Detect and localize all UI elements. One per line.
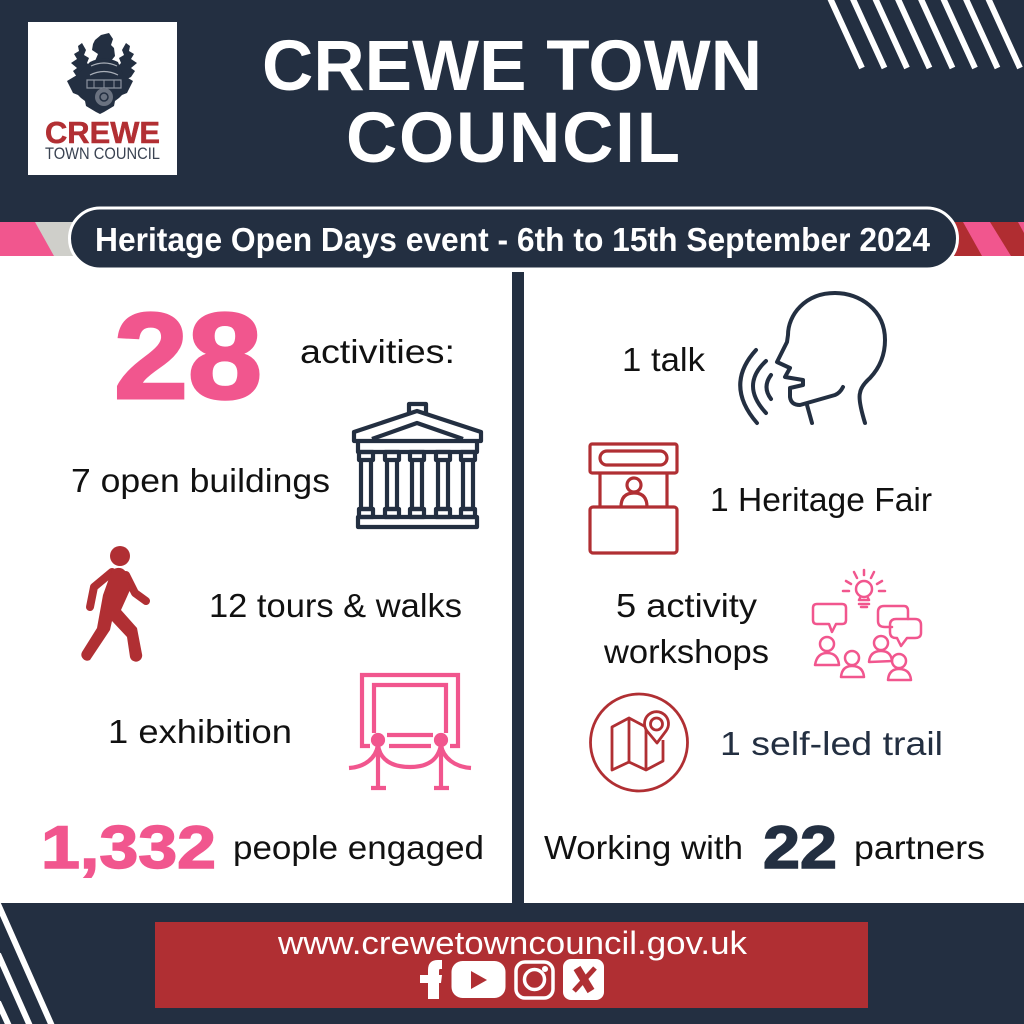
workshops label (603, 588, 769, 671)
ribbon right (940, 222, 1024, 256)
workshops label: workshops (603, 634, 769, 671)
title: COUNCIL (346, 99, 680, 178)
logo panel (28, 22, 177, 175)
icon: speaking head (740, 293, 885, 423)
Heritage Fair label: 1 Heritage Fair (710, 482, 932, 519)
stat: partners: 22 (763, 814, 837, 881)
icon: stall (590, 444, 677, 553)
workshops label: 5 activity (616, 588, 757, 625)
self-led trail label: 1 self-led trail (720, 726, 943, 763)
centre divider (512, 272, 524, 904)
icon: exhibition rope (349, 675, 471, 788)
stat: partners: partners (854, 830, 985, 867)
footer band (0, 903, 1024, 1024)
icon: map in circle (590, 694, 688, 791)
stat: partners: Working with (544, 830, 743, 867)
date banner (70, 208, 958, 269)
logo wordmark: CREWE (45, 115, 160, 150)
icon: instagram (516, 962, 553, 998)
title (262, 27, 762, 178)
tours and walks label: 12 tours & walks (209, 588, 462, 625)
ribbon left (0, 222, 90, 256)
icon: facebook (420, 960, 442, 999)
stat: 28 activities: 28 (114, 288, 262, 424)
exhibition label: 1 exhibition (108, 714, 292, 751)
header band (0, 0, 1024, 223)
logo wordmark: TOWN COUNCIL (45, 145, 160, 163)
icon: X (563, 959, 604, 1000)
icon: coat of arms (67, 33, 137, 114)
stat: partners (544, 814, 985, 881)
stat: people engaged (41, 814, 484, 881)
stat: 28 activities (114, 288, 455, 424)
stat: people engaged: 1,332 (41, 814, 216, 881)
icon: workshop group (813, 570, 921, 680)
icon: classical building (354, 404, 481, 527)
stat: people engaged: people engaged (233, 830, 484, 867)
footer panel (155, 922, 868, 1008)
website: www.crewetowncouncil.gov.uk (277, 925, 748, 961)
talk label: 1 talk (622, 342, 705, 379)
open buildings label: 7 open buildings (71, 463, 330, 500)
stat: 28 activities: activities: (300, 334, 455, 371)
icon: walking person (81, 546, 146, 662)
date banner: Heritage Open Days event - 6th to 15th September 2024 (95, 221, 931, 258)
icon: youtube (452, 961, 506, 998)
title: CREWE TOWN (262, 27, 762, 106)
